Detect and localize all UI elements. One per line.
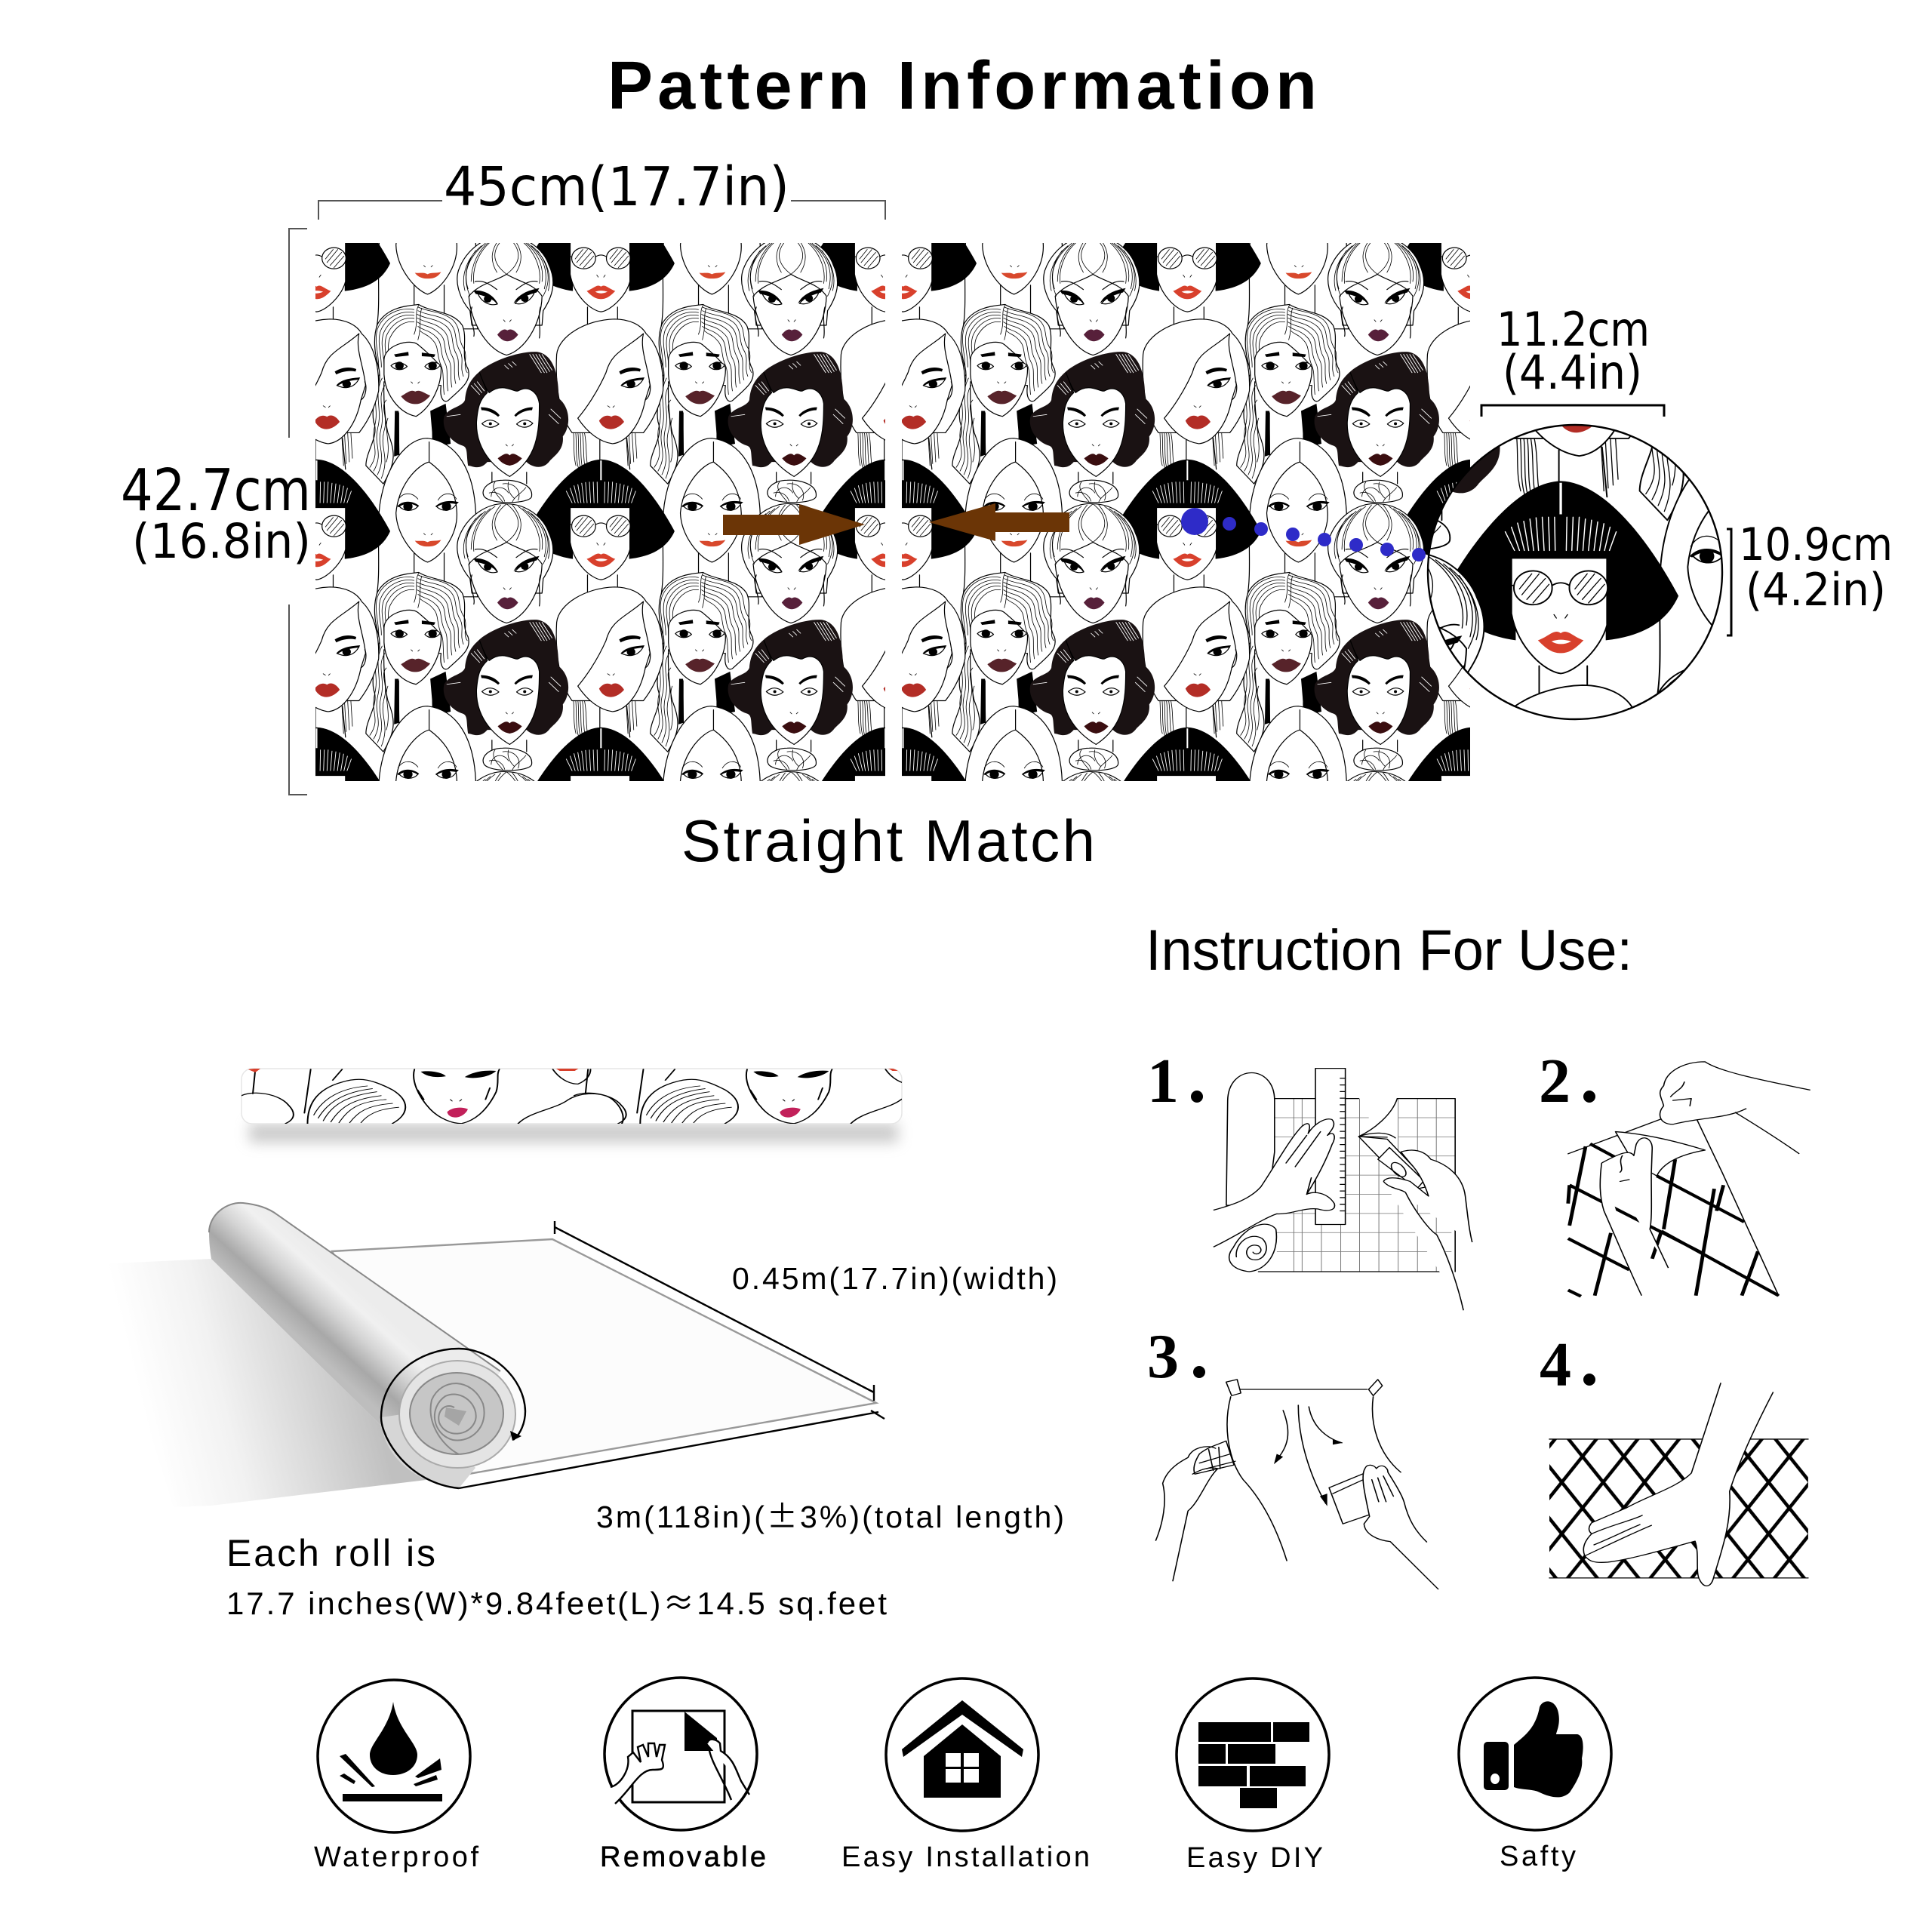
step 3: 3 (1147, 1321, 1179, 1392)
wallpaper panel right (863, 243, 1724, 781)
label: waterproof: Waterproof (314, 1841, 478, 1873)
height dimension 42.7cm: 42.7cm (121, 457, 311, 525)
step 3 (1147, 1321, 1438, 1589)
repeat width dimension 11.2cm: (4.4in) (1503, 345, 1642, 400)
height dimension 42.7cm (121, 229, 311, 795)
rolled wallpaper product (242, 1067, 956, 1143)
title: Pattern Information (608, 48, 1317, 124)
brown arrow pointing left (929, 503, 1069, 541)
step 4 (1540, 1330, 1808, 1586)
repeat height dimension 10.9cm: 10.9cm (1739, 518, 1893, 571)
repeat width dimension 11.2cm (1481, 302, 1664, 417)
label: easy installation: Easy Installation (841, 1841, 1090, 1873)
step 1 (1147, 1046, 1472, 1310)
label: easy diy: Easy DIY (1186, 1842, 1323, 1874)
wallpaper panel left (82, 36, 959, 891)
repeat height dimension 10.9cm (1727, 518, 1893, 635)
step 4: 4 (1540, 1330, 1571, 1400)
straight match label: Straight Match (681, 808, 1095, 874)
width dimension 45cm (318, 155, 885, 220)
blue magnifier dots (1181, 508, 1426, 561)
roll length label: 3m(118in)(±3%)(total length) (596, 1491, 1064, 1537)
roll width label: 0.45m(17.7in)(width) (732, 1261, 1057, 1296)
magnified pattern circle (1426, 424, 1724, 720)
step 2 (1539, 1046, 1810, 1297)
brown arrow pointing right (723, 504, 865, 545)
icon: safety thumbs up (1459, 1678, 1611, 1830)
step 2: 2 (1539, 1046, 1571, 1116)
instruction heading: Instruction For Use: (1146, 918, 1632, 983)
icon: waterproof (318, 1680, 470, 1832)
roll size summary: Each roll is (226, 1532, 435, 1574)
repeat width dimension 11.2cm: 11.2cm (1497, 302, 1650, 357)
icon: removable (605, 1678, 757, 1830)
icon: easy installation (886, 1678, 1038, 1831)
step 1: 1 (1147, 1046, 1179, 1116)
roll size summary: 17.7 inches(W)*9.84feet(L)≈14.5 sq.feet (226, 1578, 887, 1624)
width dimension 45cm: 45cm(17.7in) (444, 155, 789, 218)
height dimension 42.7cm: (16.8in) (132, 514, 311, 569)
icon: easy diy (1177, 1678, 1329, 1831)
roll size summary (226, 1532, 887, 1624)
label: safty: Safty (1500, 1841, 1576, 1872)
label: removable: Removable (600, 1841, 766, 1873)
repeat height dimension 10.9cm: (4.2in) (1746, 564, 1886, 617)
unrolled wallpaper diagram (97, 1203, 884, 1507)
